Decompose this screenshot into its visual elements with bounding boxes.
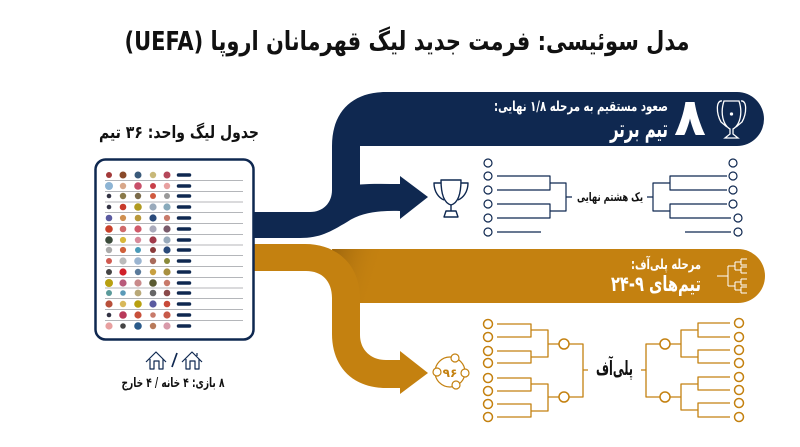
label: round of 16: یک هشتم نهایی xyxy=(577,190,643,204)
band shadow xyxy=(332,249,380,303)
text: 96: ۹۶ xyxy=(443,366,457,380)
right bracket circles xyxy=(729,159,742,236)
knockout bracket: round of 16 xyxy=(484,159,742,236)
navy flow band and arrow xyxy=(254,92,764,238)
right circles xyxy=(660,318,744,422)
icon: home and away houses xyxy=(146,352,202,369)
big number eight: ۸ xyxy=(674,88,706,148)
icon: champions league trophy xyxy=(717,101,746,138)
icon: trophy xyxy=(434,180,468,217)
gold playoff band xyxy=(332,249,765,303)
heading: league table: جدول لیگ واحد: ۳۶ تیم xyxy=(99,122,259,143)
label: playoff: پلی‌آف xyxy=(596,355,633,381)
panel: league table card xyxy=(96,160,254,340)
text: top teams: تیم برتر xyxy=(609,115,668,143)
left circles xyxy=(484,320,569,422)
text: eight matches: ۸ بازی: ۴ خانه / ۴ خارج xyxy=(122,376,225,391)
right bracket lines xyxy=(647,176,731,232)
text: playoff stage: مرحله پلی‌آف: xyxy=(631,255,701,273)
gold flow arrow xyxy=(254,244,428,394)
left bracket lines xyxy=(497,176,572,232)
icon: 96 teams xyxy=(433,354,469,389)
left bracket circles xyxy=(484,159,492,236)
icon: bracket xyxy=(717,259,747,293)
text: teams 9 to 24: تیم‌های ۹-۲۴ xyxy=(611,272,701,296)
text: direct qualification: صعود مستقیم به مرحله ۱/۸ نهایی: xyxy=(494,99,668,115)
team rows xyxy=(105,172,171,330)
row separators xyxy=(105,180,243,320)
standing pills xyxy=(178,175,190,326)
playoff bracket xyxy=(484,318,744,422)
left lines xyxy=(497,324,588,417)
title: مدل سوئیسی: فرمت جدید لیگ قهرمانان اروپا (UEFA) xyxy=(124,26,690,57)
right lines xyxy=(641,323,730,417)
